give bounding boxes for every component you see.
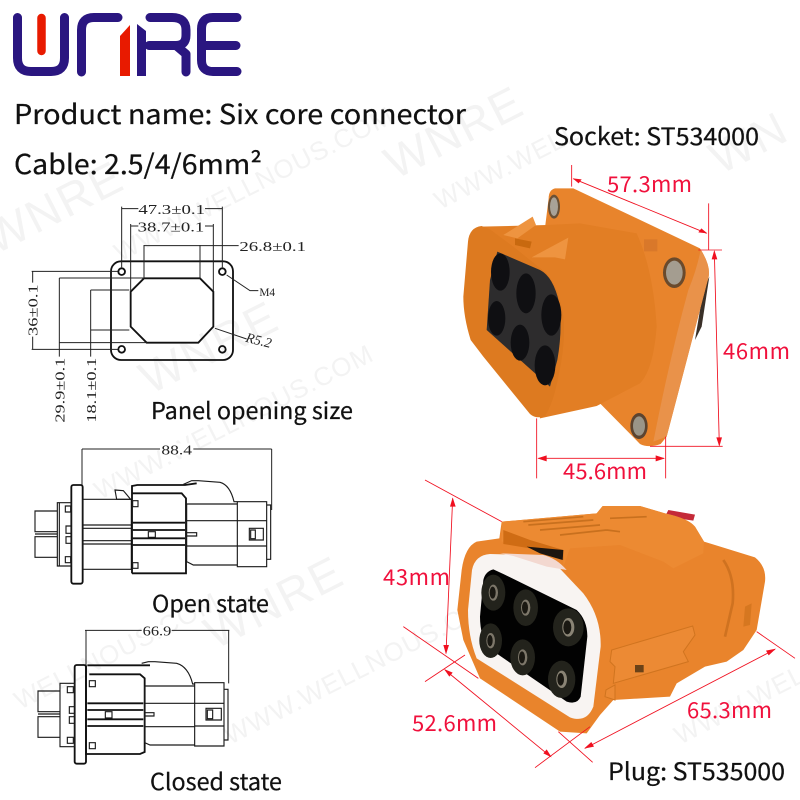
label: open state: Open state <box>152 585 269 619</box>
plug latch cover <box>502 506 704 568</box>
technical drawing: panel opening: 18.1±0.1 <box>85 358 100 423</box>
plug side ribs <box>605 626 695 700</box>
plug dimension lines <box>403 480 795 768</box>
watermarks: WWW.WELLNOUS.COM <box>89 338 378 505</box>
watermarks: WNRE <box>196 545 352 659</box>
technical drawing: panel opening: M4 <box>259 287 275 299</box>
plug red release tab <box>665 510 695 521</box>
dimension: 45.6mm: 45.6mm <box>563 454 647 486</box>
flange lit edge <box>653 250 709 442</box>
heading: cable: Cable: 2.5/4/6mm² <box>14 143 262 182</box>
socket mark <box>644 239 657 251</box>
plug contacts <box>479 575 584 698</box>
socket black insert <box>487 252 561 387</box>
plug black face <box>480 569 587 703</box>
watermarks: WNRE <box>376 75 532 189</box>
watermarks: WELLNOUS.COM <box>9 586 224 715</box>
label: socket model: Socket: ST534000 <box>554 117 759 152</box>
label: closed state: Closed state <box>150 763 282 797</box>
socket mounting flange <box>545 188 709 446</box>
socket front rim <box>463 226 564 417</box>
technical drawing: panel opening <box>26 203 306 423</box>
plug latch opening <box>503 530 563 560</box>
plug latch ribs <box>523 517 647 535</box>
heading: product name: Product name: Six core connector <box>14 93 467 132</box>
dimension: 46mm: 46mm <box>723 334 790 366</box>
technical drawing: closed state <box>38 624 229 764</box>
technical drawing: panel opening: 47.3±0.1 <box>138 203 205 218</box>
socket rear edge <box>695 277 709 340</box>
socket body <box>480 223 657 418</box>
watermarks: WWW.WELLNOUS.COM <box>219 583 508 750</box>
dimension: 65.3mm: 65.3mm <box>687 693 772 725</box>
socket dimension lines <box>537 165 723 478</box>
dimension: 43mm: 43mm <box>383 560 450 592</box>
watermarks: WN <box>701 101 796 184</box>
logo: WNRE <box>18 18 237 76</box>
dimension: 52.6mm: 52.6mm <box>412 706 497 738</box>
socket contact holes <box>488 253 561 385</box>
plug white gasket <box>468 554 601 719</box>
technical drawing: panel opening: 36±0.1 <box>26 284 41 336</box>
technical drawing: panel opening: 26.8±0.1 <box>239 240 306 255</box>
watermarks: WWW.WELL <box>429 117 584 215</box>
photo: orange plug <box>457 506 765 733</box>
socket latch guides <box>503 217 568 259</box>
technical drawing: panel opening: 29.9±0.1 <box>54 358 69 423</box>
technical drawing: panel opening: 38.7±0.1 <box>138 220 204 235</box>
technical drawing: closed state: 66.9 <box>143 624 171 639</box>
photo: orange socket <box>463 188 709 446</box>
technical drawing: open state <box>35 443 272 584</box>
label: panel opening size: Panel opening size <box>151 392 353 426</box>
technical drawing: open state: 88.4 <box>161 444 192 459</box>
dimension: 57.3mm: 57.3mm <box>607 167 692 199</box>
socket screw bushes <box>548 195 686 439</box>
label: plug model: Plug: ST535000 <box>608 752 785 787</box>
watermarks: WNRE <box>131 290 287 404</box>
plug collar seam <box>723 560 733 637</box>
technical drawing: panel opening: R5.2 <box>243 331 273 352</box>
plug collar notch <box>743 603 752 627</box>
watermarks: WWW.WELLNOUS.COM <box>109 100 398 267</box>
plug housing <box>457 506 765 733</box>
